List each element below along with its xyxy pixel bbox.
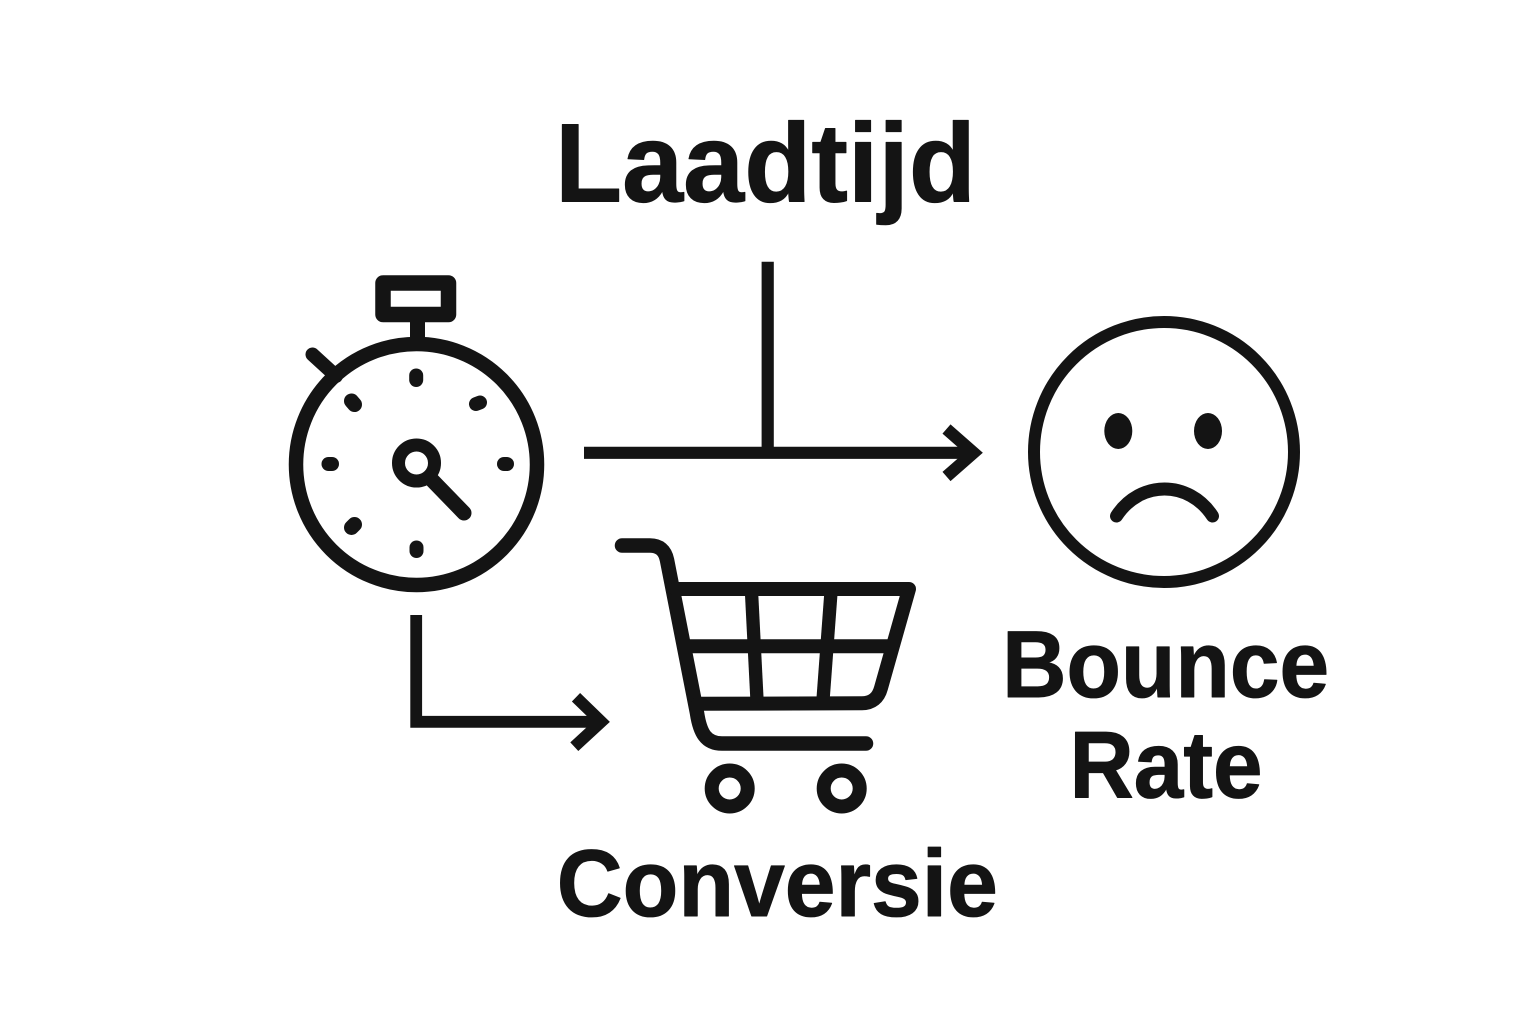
arrow: laadtijd to bounce rate — [584, 262, 974, 476]
clock hand — [431, 479, 464, 513]
cart basket — [676, 589, 909, 704]
clock hub — [398, 445, 434, 481]
cart wheels — [712, 770, 860, 806]
label: Bounce Rate: Bounce — [1002, 612, 1329, 718]
title: Laadtijd: Laadtijd — [555, 100, 976, 225]
icon: sad face — [1034, 322, 1294, 582]
arrow: stopwatch to cart — [416, 615, 601, 747]
label: Conversie: Conversie — [557, 831, 998, 937]
stopwatch crown — [383, 283, 448, 314]
icon: stopwatch — [296, 283, 537, 585]
icon: shopping cart — [622, 546, 909, 806]
side lever — [312, 354, 336, 376]
stopwatch body — [296, 344, 537, 585]
label: Bounce Rate — [1002, 612, 1329, 818]
hour ticks — [328, 376, 507, 551]
cart handle and frame — [622, 546, 866, 744]
label: Bounce Rate: Rate — [1070, 712, 1262, 818]
